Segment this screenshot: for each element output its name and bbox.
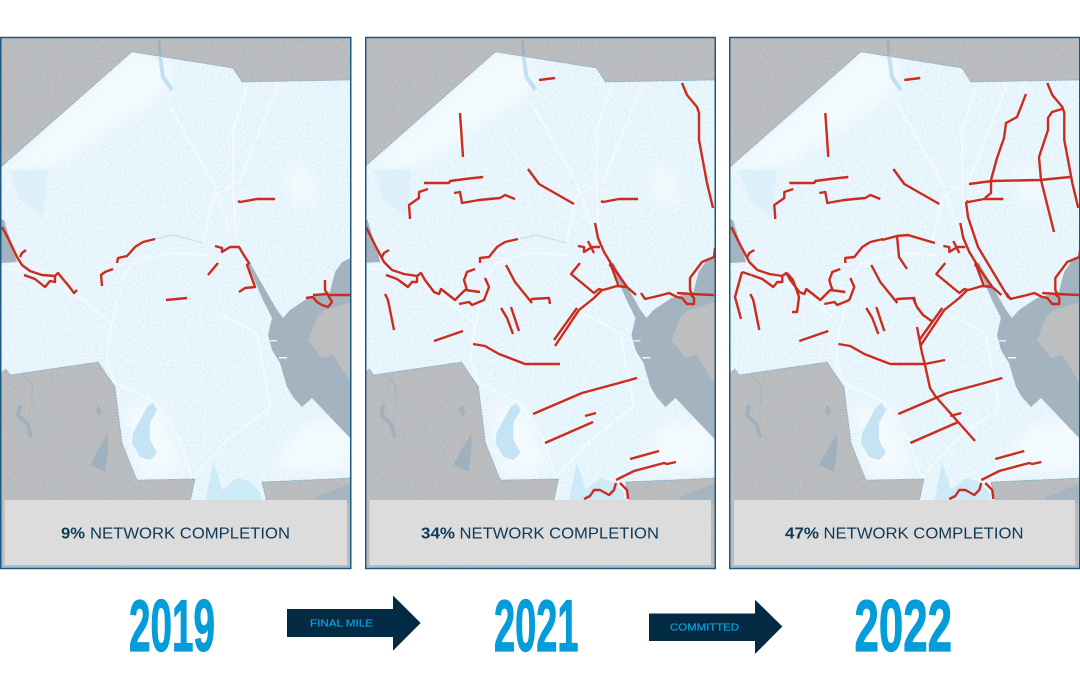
panel: 2019 map <box>0 36 354 572</box>
panel: 2022 map <box>727 36 1080 572</box>
arrow: committed: COMMITTED <box>670 622 739 634</box>
label box 2021: 34% <box>421 526 455 542</box>
panel border 2019 <box>1 38 351 568</box>
base map 2021 <box>362 36 718 572</box>
base map 2022 <box>727 36 1080 572</box>
arrow: final mile: FINAL MILE <box>310 618 373 630</box>
label box 2021: NETWORK COMPLETION <box>460 526 659 542</box>
label box 2019: 9% <box>61 526 85 542</box>
network lines 2022 <box>731 78 1080 499</box>
label box 2019: NETWORK COMPLETION <box>90 526 290 542</box>
year 2019: 2019 <box>129 586 215 667</box>
label box 2021 <box>370 500 711 565</box>
label box 2022 <box>734 500 1075 565</box>
panel border 2022 <box>730 38 1080 568</box>
year 2022: 2022 <box>854 586 952 667</box>
network lines 2019 <box>2 199 350 307</box>
network lines 2021 <box>366 78 715 499</box>
label box 2022: NETWORK COMPLETION <box>824 526 1024 542</box>
panel: 2021 map <box>362 36 718 572</box>
label box 2019 <box>4 500 347 565</box>
label box 2022: 47% <box>785 526 819 542</box>
arrow: committed <box>649 600 782 654</box>
panel border 2021 <box>366 38 715 568</box>
arrow: final mile <box>287 596 421 651</box>
base map 2019 <box>0 36 354 572</box>
year 2021: 2021 <box>494 586 578 667</box>
